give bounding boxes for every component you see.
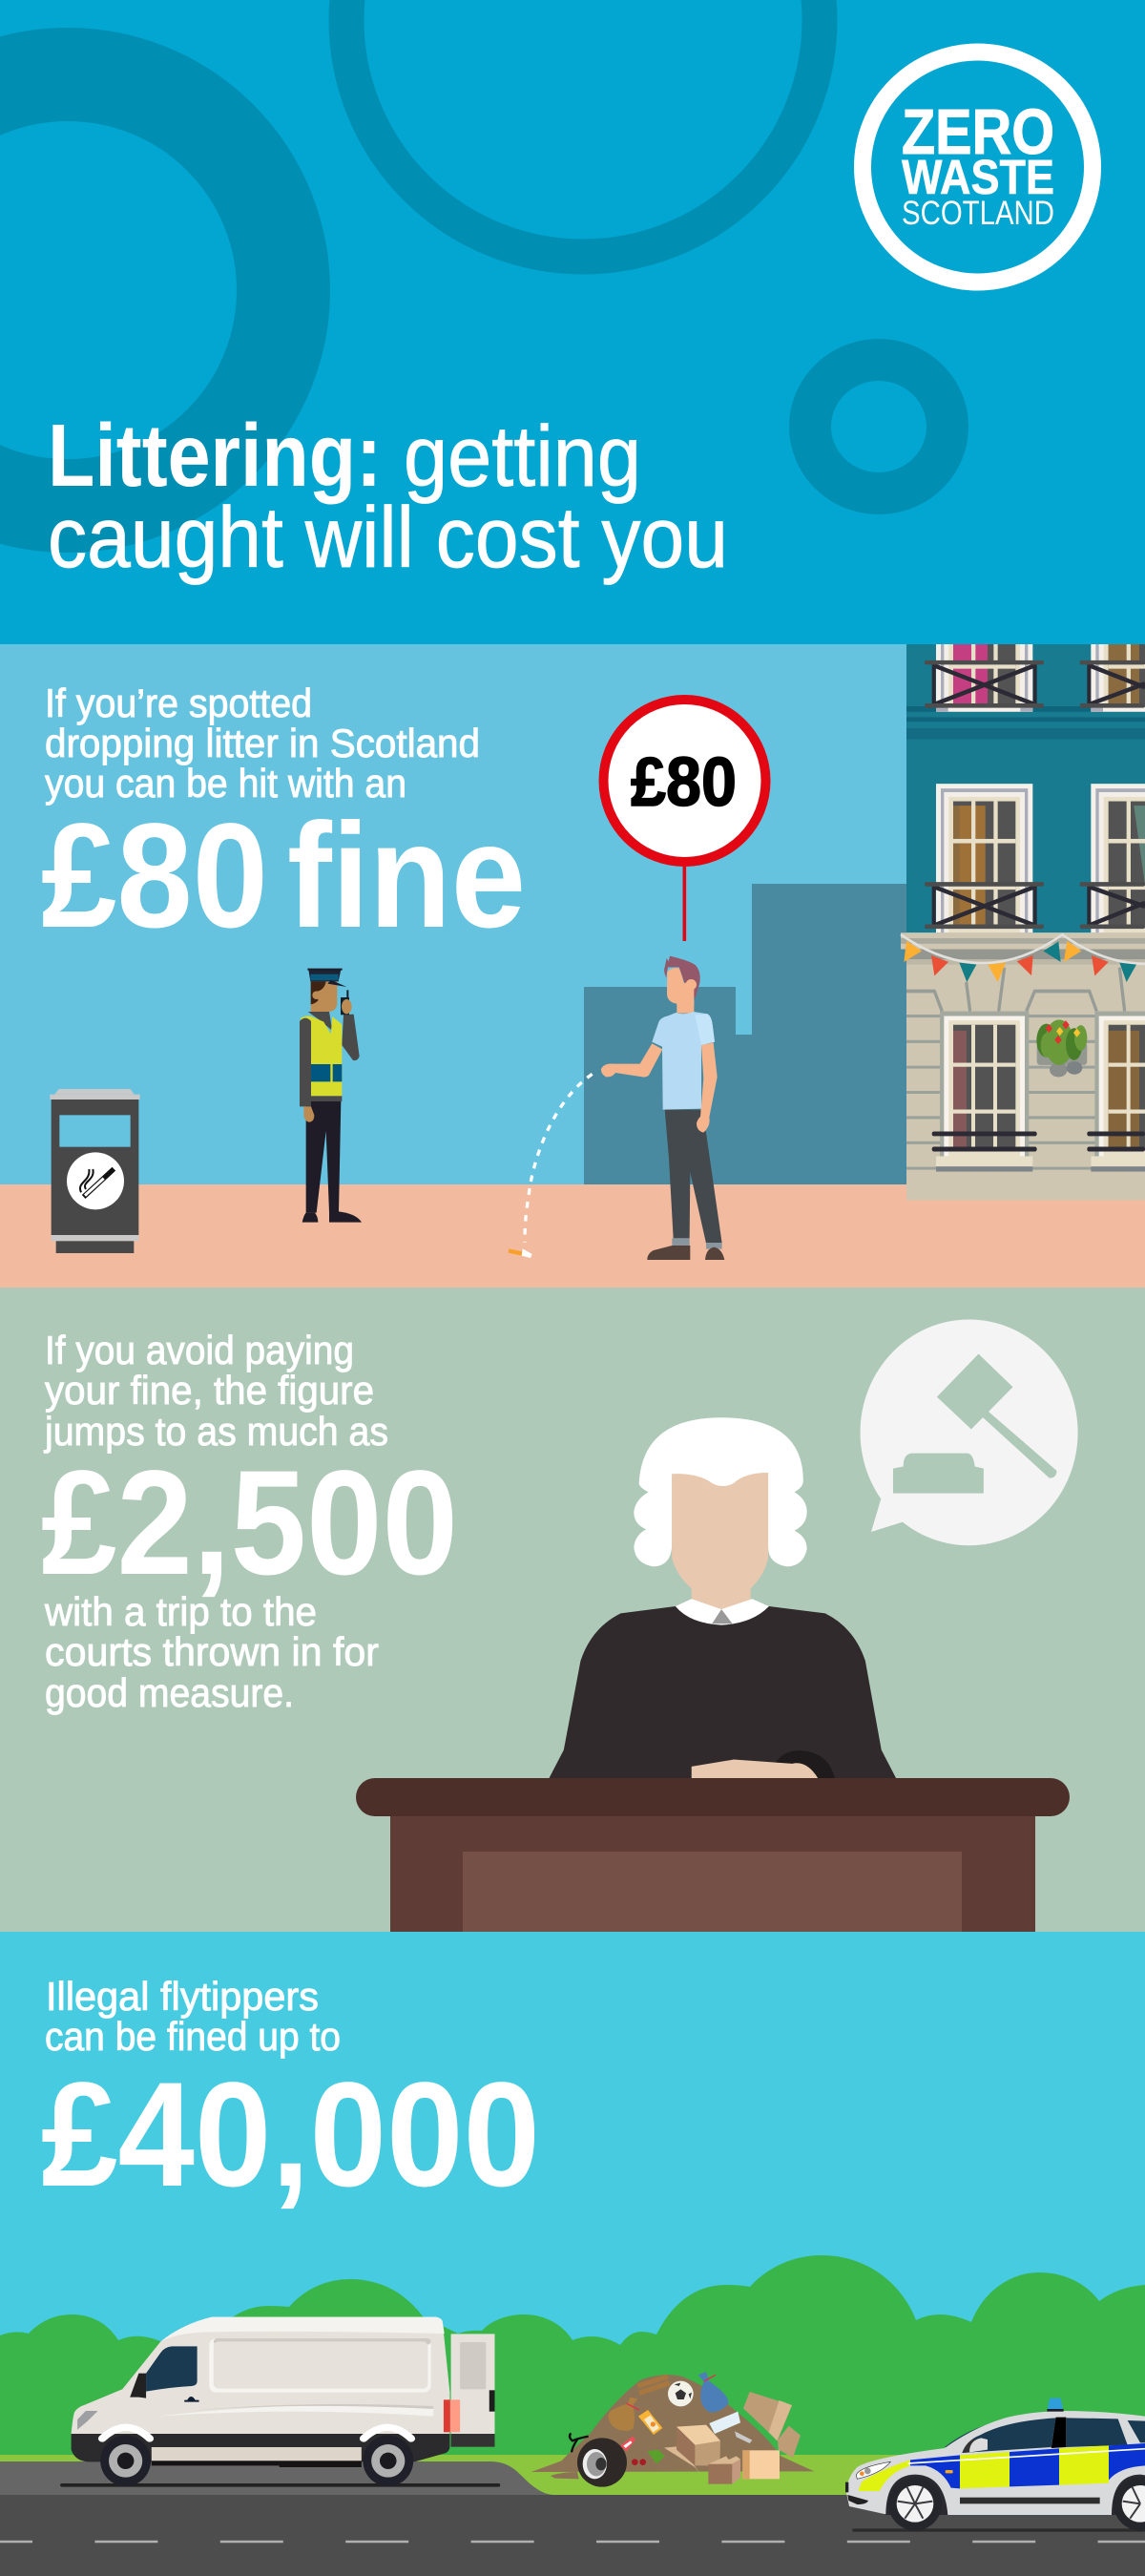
football — [668, 2381, 694, 2406]
panel: court — [0, 1288, 1145, 1932]
judge — [550, 1417, 896, 1778]
text: avoid paying — [43, 1328, 388, 1454]
logo: Zero Waste Scotland: SCOTLAND — [902, 195, 1054, 232]
box: small — [708, 2464, 732, 2484]
icon: cigarette — [67, 1152, 124, 1209]
litter bin — [50, 1089, 140, 1253]
title — [48, 406, 728, 586]
juice box — [638, 2410, 662, 2435]
traffic warden — [300, 969, 362, 1223]
text: illegal flytippers: Illegal flytippers — [46, 1974, 319, 2019]
tyre — [577, 2438, 627, 2487]
wheels — [100, 2427, 413, 2486]
decorative ring: left — [0, 74, 283, 506]
stat: £80 fine — [41, 793, 526, 959]
falling cigarette trail — [509, 1074, 593, 1258]
text: spotted dropping litter: If you’re spotted — [45, 681, 312, 725]
speech bubble with gavel — [861, 1320, 1078, 1545]
front wheel — [885, 2475, 947, 2530]
trees — [0, 2255, 1145, 2482]
building — [901, 644, 1145, 1200]
background buildings — [584, 884, 906, 1184]
fence — [637, 2377, 670, 2393]
panel: £80 fine — [0, 644, 1145, 1288]
milk carton — [709, 2412, 740, 2434]
logo: Zero Waste Scotland — [863, 52, 1093, 283]
text: illegal flytippers — [45, 1974, 341, 2059]
judge's bench — [356, 1778, 1070, 1932]
blue bag — [698, 2372, 728, 2412]
flat cardboard — [664, 2446, 701, 2475]
text: trip to the courts: good measure. — [45, 1670, 294, 1715]
panel: littering header — [0, 0, 1145, 644]
title: caught will cost you — [48, 491, 728, 586]
text: spotted dropping litter: you can be hit with an — [45, 761, 406, 806]
text: illegal flytippers: can be fined up to — [45, 2014, 341, 2059]
middle windows — [925, 784, 1145, 932]
road and verge — [0, 2455, 1145, 2576]
bottle — [735, 2431, 752, 2443]
rear wheel — [1112, 2475, 1145, 2530]
text: spotted dropping litter — [45, 681, 480, 806]
sign: £80 fine: £80 — [631, 744, 737, 821]
sign: £80 fine — [603, 700, 765, 941]
stone ground floor — [901, 932, 1145, 1200]
stat: £80 fine: fine — [287, 793, 526, 959]
man dropping litter — [601, 956, 724, 1260]
ground floor windows — [932, 1012, 1145, 1172]
text: avoid paying: If you avoid paying — [45, 1328, 354, 1372]
stat: £40,000: £40,000 — [41, 2052, 540, 2218]
police car — [845, 2398, 1145, 2532]
upper windows — [925, 644, 1145, 712]
icon: gavel — [893, 1354, 1056, 1494]
peas — [647, 2450, 665, 2464]
brown bag — [608, 2398, 637, 2431]
paper bag — [742, 2450, 780, 2479]
text: spotted dropping litter: dropping litter in Scotland — [45, 721, 480, 765]
text: avoid paying: your fine, the figure — [45, 1368, 374, 1413]
title: getting — [404, 409, 641, 505]
box: open cube — [677, 2427, 720, 2465]
bunting — [901, 934, 1145, 982]
flower box — [1036, 1019, 1087, 1077]
text: trip to the courts — [44, 1589, 379, 1715]
box: large tan — [778, 2426, 801, 2458]
decorative ring: top — [346, 0, 820, 257]
decorative ring: small — [810, 360, 947, 493]
title: Littering: — [48, 406, 382, 505]
stat: £80 fine: £80 — [41, 793, 268, 959]
text: trip to the courts: with a trip to the — [44, 1589, 317, 1634]
panel: flytipping — [0, 1932, 1145, 2576]
icon: cigarette butt — [509, 1248, 523, 1256]
rubbish pile — [531, 2372, 814, 2487]
stat: £2,500: £2,500 — [41, 1440, 458, 1606]
shampoo bottle — [620, 2437, 635, 2451]
logo: Zero Waste Scotland: ZERO — [902, 96, 1054, 168]
flytipper van — [60, 2317, 500, 2487]
cherries — [632, 2459, 638, 2465]
text: trip to the courts: courts thrown in for — [45, 1629, 379, 1674]
logo: Zero Waste Scotland: WASTE — [902, 150, 1054, 204]
black hook — [570, 2433, 589, 2452]
text: avoid paying: jumps to as much as — [43, 1409, 388, 1454]
